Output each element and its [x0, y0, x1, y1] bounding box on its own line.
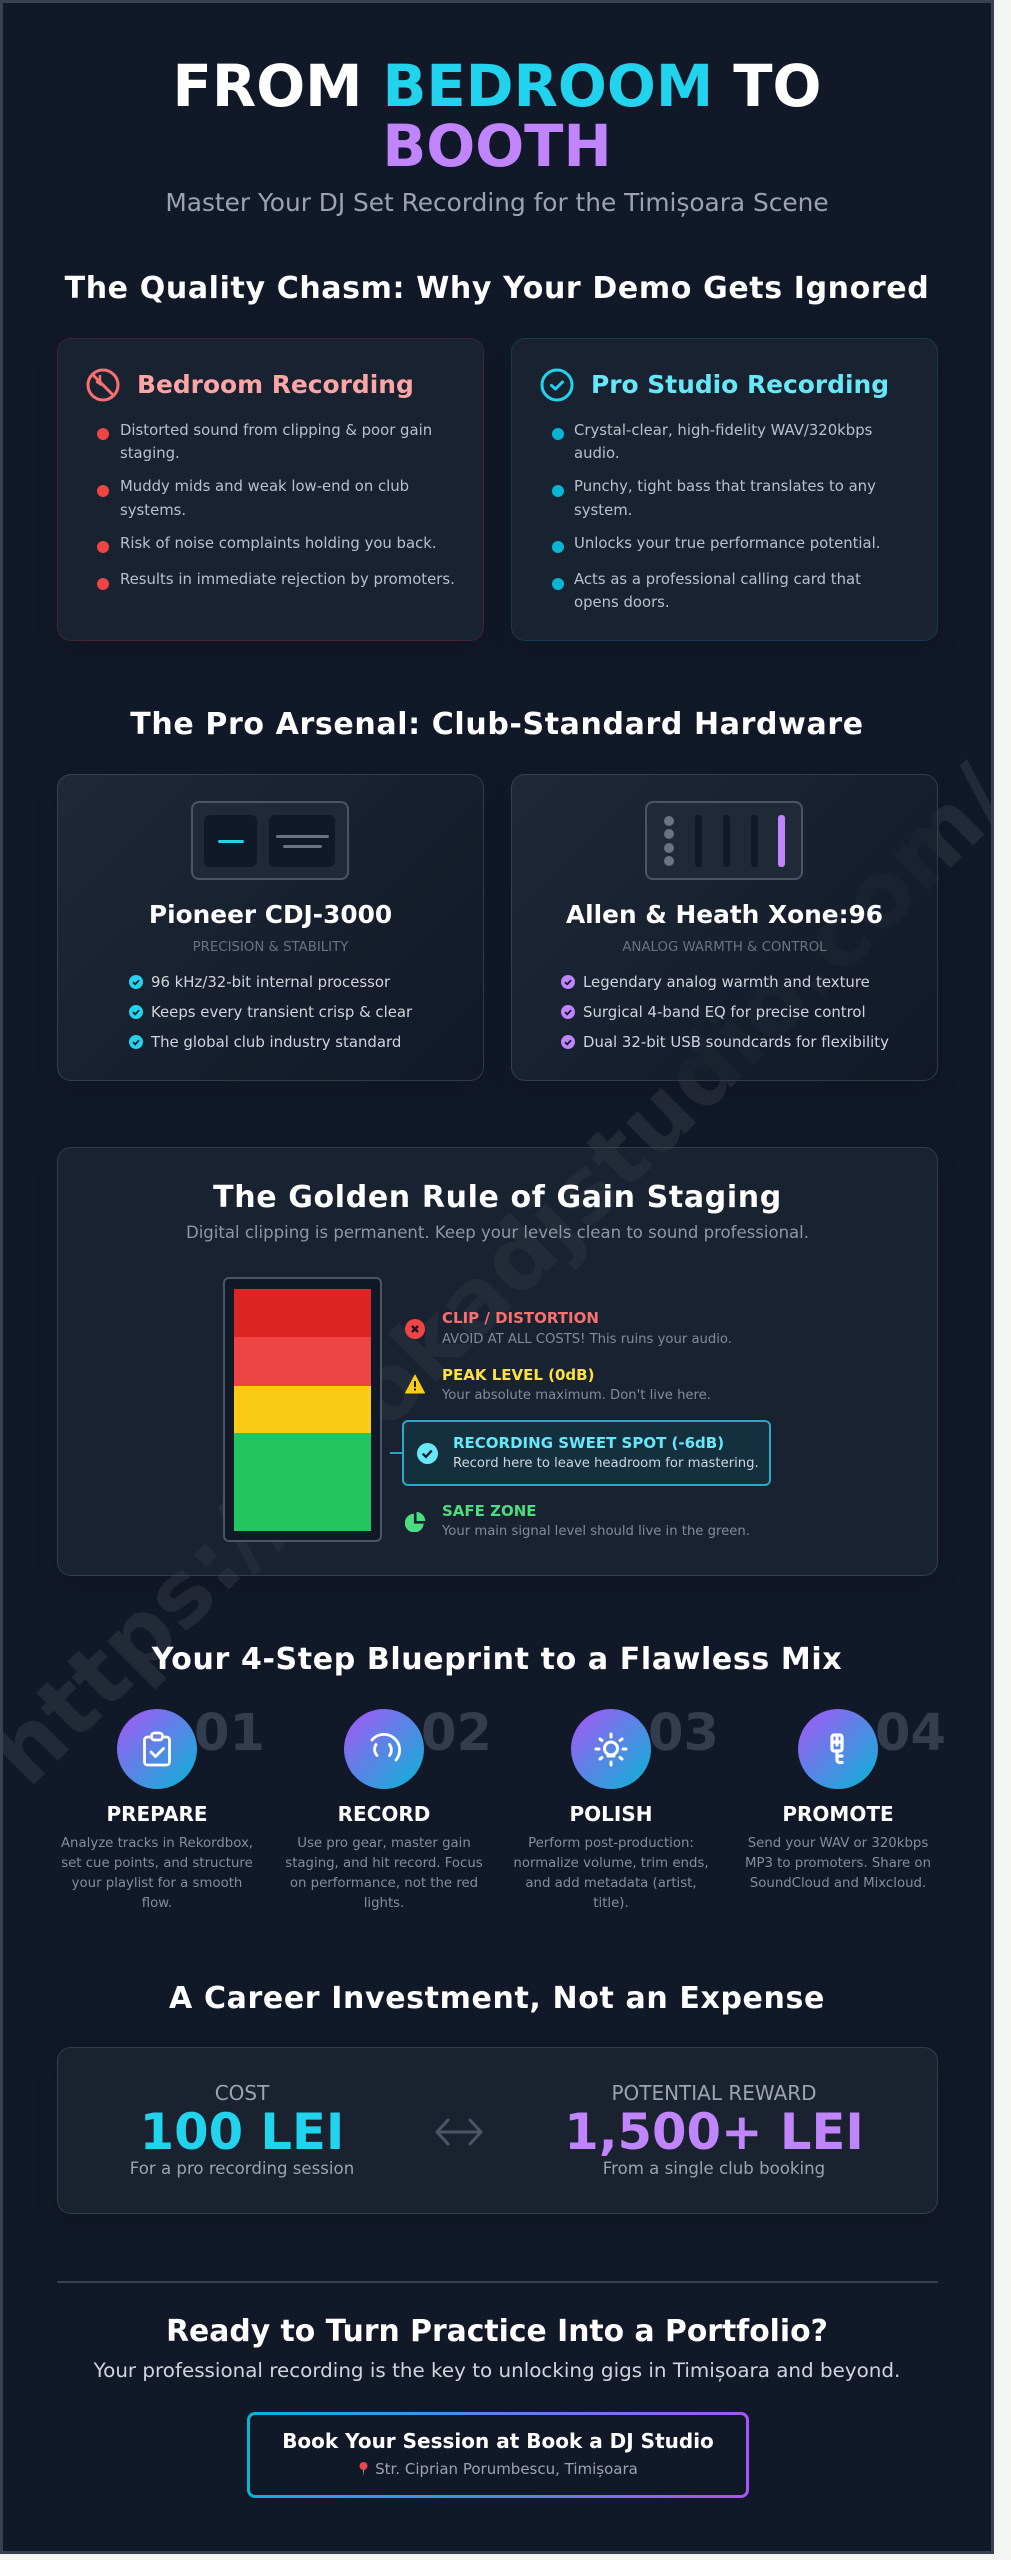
bullet marker	[552, 428, 564, 440]
step text: flow.	[142, 1896, 172, 1911]
icon: no bedroom	[86, 368, 120, 402]
step text: SoundCloud and Mixcloud.	[750, 1876, 926, 1891]
clip band	[234, 1289, 371, 1337]
feature text: Dual 32-bit USB soundcards for flexibility	[583, 1033, 889, 1051]
bullet marker	[97, 578, 109, 590]
icon: mixer device	[645, 801, 803, 880]
bullet marker	[552, 485, 564, 497]
meter label: sweet spot	[402, 1420, 771, 1486]
panel: bedroom recording	[57, 338, 484, 641]
level meter	[223, 1277, 382, 1542]
cost value: 100 LEI	[140, 2103, 344, 2161]
label title: RECORDING SWEET SPOT (-6dB)	[453, 1434, 724, 1452]
panel: cost vs reward	[57, 2047, 938, 2214]
panel: pioneer cdj-3000	[57, 774, 484, 1081]
step 3: polish	[513, 1704, 719, 1911]
bullet marker	[97, 541, 109, 553]
step number: 01	[194, 1704, 265, 1763]
list text: Distorted sound from clipping & poor gain	[120, 421, 432, 439]
heading: quality chasm: The Quality Chasm: Why Your Demo Gets Ignored	[65, 271, 929, 306]
title: BOOTH	[382, 113, 612, 180]
step 2: record	[285, 1704, 492, 1911]
reward label: POTENTIAL REWARD	[611, 2081, 817, 2105]
step text	[285, 1836, 483, 1911]
heading: golden rule: The Golden Rule of Gain Staging	[213, 1180, 782, 1215]
device name: Pioneer CDJ-3000	[149, 900, 392, 929]
step text: Use pro gear, master gain	[297, 1836, 471, 1851]
step text: your playlist for a smooth	[72, 1876, 242, 1891]
list text: Acts as a professional calling card that	[574, 570, 861, 588]
icon: promote	[798, 1709, 878, 1789]
feature text: Legendary analog warmth and texture	[583, 973, 870, 991]
feature text: The global club industry standard	[151, 1033, 401, 1051]
device name: Allen & Heath Xone:96	[566, 900, 883, 929]
icon: x circle	[405, 1319, 425, 1339]
title	[173, 53, 821, 180]
label text: Your main signal level should live in the green.	[442, 1524, 750, 1539]
button address: Str. Ciprian Porumbescu, Timișoara	[375, 2460, 638, 2478]
divider	[57, 2281, 938, 2283]
feature text: Keeps every transient crisp & clear	[151, 1003, 412, 1021]
safe band	[234, 1433, 371, 1531]
reward column	[564, 2081, 864, 2178]
step text: Analyze tracks in Rekordbox,	[61, 1836, 253, 1851]
bullet marker	[552, 541, 564, 553]
panel: pro studio recording	[511, 338, 938, 641]
label text: Your absolute maximum. Don't live here.	[442, 1388, 711, 1403]
heading: bedroom recording: Bedroom Recording	[137, 370, 414, 399]
check icon	[129, 1035, 143, 1049]
icon: cdj device	[191, 801, 349, 880]
label title: PEAK LEVEL (0dB)	[442, 1366, 594, 1384]
subtitle: Master Your DJ Set Recording for the Timișoara Scene	[165, 188, 829, 217]
heading: pro studio recording: Pro Studio Recording	[591, 370, 889, 399]
list text: Results in immediate rejection by promoters.	[120, 570, 455, 588]
feature text: Surgical 4-band EQ for precise control	[583, 1003, 866, 1021]
connector	[390, 1452, 402, 1454]
button label: Book Your Session at Book a DJ Studio	[282, 2429, 714, 2453]
check icon	[561, 1005, 575, 1019]
panel: allen & heath xone:96	[511, 774, 938, 1081]
step 4: promote	[745, 1704, 946, 1891]
reward note: From a single club booking	[603, 2159, 825, 2178]
meter label: clip	[405, 1309, 732, 1347]
icon: check circle	[540, 368, 574, 402]
step title: RECORD	[338, 1802, 430, 1826]
step text: staging, and hit record. Focus	[285, 1856, 483, 1871]
list text: system.	[574, 501, 632, 519]
label title: SAFE ZONE	[442, 1502, 537, 1520]
step text: and add metadata (artist,	[525, 1876, 697, 1891]
step text: MP3 to promoters. Share on	[745, 1856, 931, 1871]
heading: pro arsenal: The Pro Arsenal: Club-Standard Hardware	[130, 707, 864, 742]
label title: CLIP / DISTORTION	[442, 1309, 599, 1327]
reward value: 1,500+ LEI	[564, 2103, 864, 2161]
step text	[61, 1836, 253, 1911]
step text: Send your WAV or 320kbps	[748, 1836, 928, 1851]
icon: exchange arrow	[436, 2118, 482, 2146]
cost label: COST	[215, 2081, 269, 2105]
heading: call to action: Ready to Turn Practice Into a Portfolio?	[166, 2314, 828, 2349]
icon: record arcs	[344, 1709, 424, 1789]
icon: clipboard	[117, 1709, 197, 1789]
step title: POLISH	[570, 1802, 652, 1826]
step title: PROMOTE	[782, 1802, 894, 1826]
subheading: Digital clipping is permanent. Keep your levels clean to sound professional.	[186, 1223, 809, 1242]
list text: opens doors.	[574, 593, 670, 611]
list text: Muddy mids and weak low-end on club	[120, 477, 409, 495]
meter label: peak	[405, 1366, 711, 1403]
step text: on performance, not the red	[290, 1876, 478, 1891]
caution band	[234, 1386, 371, 1433]
step title: PREPARE	[106, 1802, 208, 1826]
panel: gain staging	[57, 1147, 938, 1576]
bullet marker	[552, 578, 564, 590]
check icon	[129, 1005, 143, 1019]
list text: staging.	[120, 444, 180, 462]
step text: set cue points, and structure	[61, 1856, 253, 1871]
meter label: safe zone	[405, 1502, 750, 1539]
step number: 03	[648, 1704, 719, 1763]
list text: Punchy, tight bass that translates to any	[574, 477, 876, 495]
call to action text: Your professional recording is the key to unlocking gigs in Timișoara and beyond.	[94, 2359, 900, 2382]
bullet marker	[97, 485, 109, 497]
heading: career investment: A Career Investment, Not an Expense	[169, 1981, 825, 2016]
title: FROM BEDROOM TO	[173, 53, 821, 120]
check icon	[129, 975, 143, 989]
list text: audio.	[574, 444, 620, 462]
check icon	[561, 1035, 575, 1049]
step text	[745, 1836, 931, 1891]
step 1: prepare	[61, 1704, 265, 1911]
cost column	[130, 2081, 354, 2178]
label text: Record here to leave headroom for mastering.	[453, 1456, 759, 1471]
step text: Perform post-production:	[528, 1836, 694, 1851]
cost note: For a pro recording session	[130, 2159, 354, 2178]
feature text: 96 kHz/32-bit internal processor	[151, 973, 390, 991]
icon: pie	[405, 1512, 426, 1532]
label text: AVOID AT ALL COSTS! This ruins your audio.	[442, 1332, 732, 1347]
button: book your session	[247, 2412, 749, 2498]
check icon	[561, 975, 575, 989]
icon: warning triangle	[405, 1374, 425, 1394]
bullet marker	[97, 428, 109, 440]
heading: blueprint: Your 4-Step Blueprint to a Flawless Mix	[152, 1642, 842, 1677]
list text: Crystal-clear, high-fidelity WAV/320kbps	[574, 421, 872, 439]
step text: normalize volume, trim ends,	[513, 1856, 709, 1871]
list text: Unlocks your true performance potential.	[574, 534, 880, 552]
step number: 04	[875, 1704, 946, 1763]
step text: title).	[593, 1896, 629, 1911]
device tagline: ANALOG WARMTH & CONTROL	[622, 940, 827, 955]
step number: 02	[421, 1704, 492, 1763]
icon: check circle	[417, 1443, 438, 1464]
icon: light bulb	[571, 1709, 651, 1789]
peak band	[234, 1337, 371, 1386]
step text: lights.	[364, 1896, 404, 1911]
list text: systems.	[120, 501, 186, 519]
list text: Risk of noise complaints holding you back.	[120, 534, 437, 552]
step text	[513, 1836, 709, 1911]
device tagline: PRECISION & STABILITY	[193, 940, 348, 955]
